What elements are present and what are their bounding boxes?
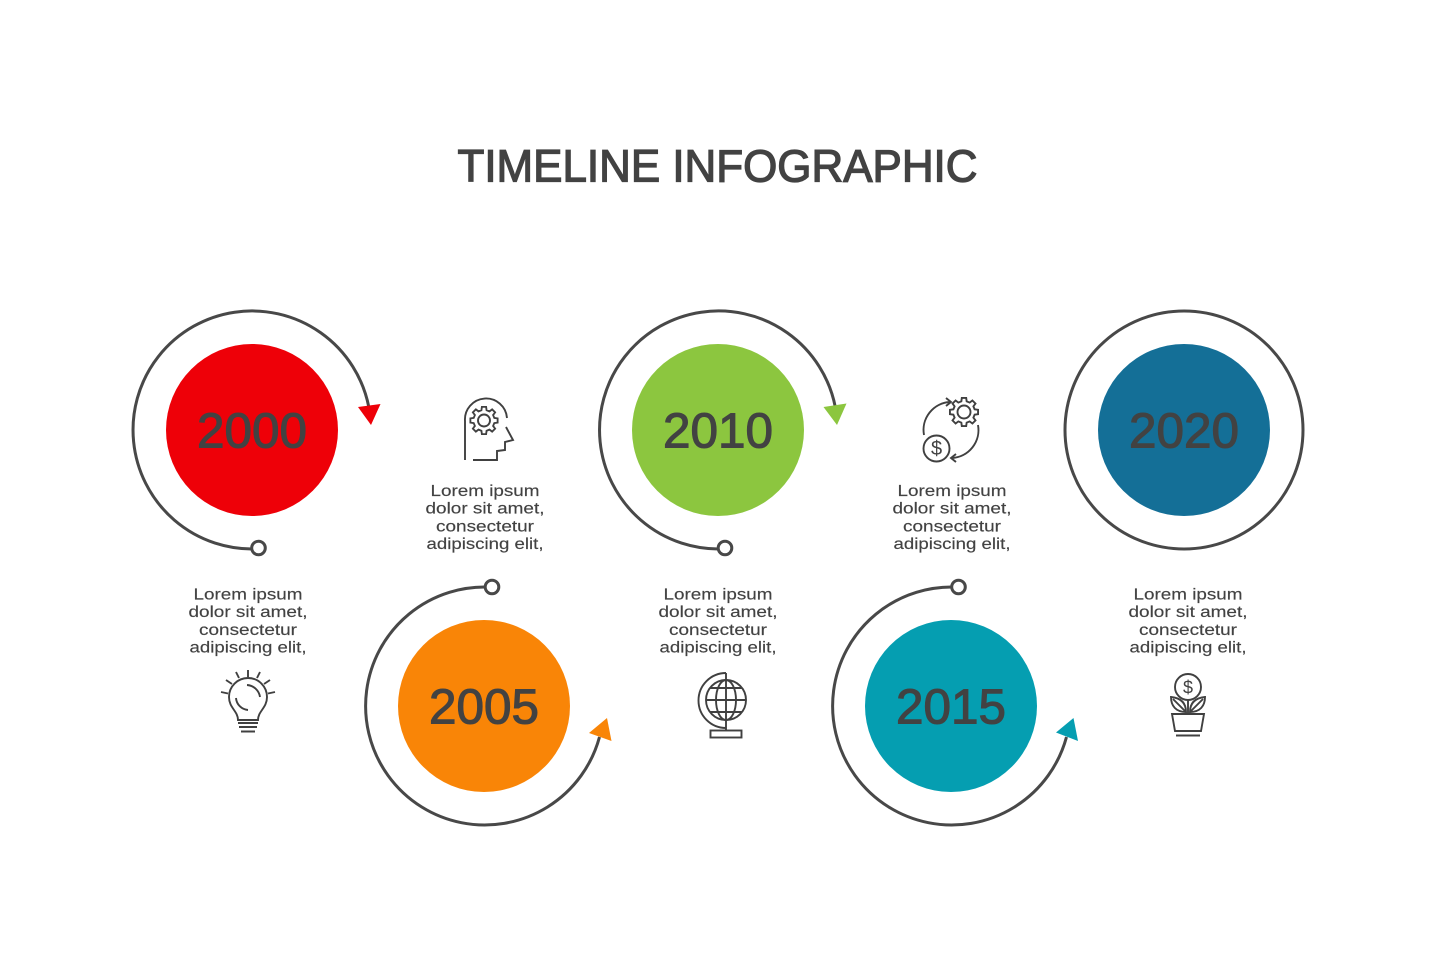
text block: 2005 xyxy=(426,483,544,553)
year badge xyxy=(398,620,570,792)
text block: 2005: Lorem ipsum xyxy=(430,483,540,500)
text block: 2010: Lorem ipsum xyxy=(664,586,772,604)
year badge xyxy=(632,344,804,516)
text block: 2015: adipiscing elit, xyxy=(894,536,1010,553)
text block: 2010: consectetur xyxy=(669,622,768,639)
text block: 2000: Lorem ipsum xyxy=(194,586,302,604)
year badge: 2010 xyxy=(663,404,773,458)
year badge: 2005 xyxy=(429,680,539,734)
full ring xyxy=(1065,311,1303,549)
text block: 2015: Lorem ipsum xyxy=(898,483,1006,500)
year badge: 2015 xyxy=(896,680,1006,734)
text block: 2005: consectetur xyxy=(436,518,535,536)
icon: gear and money cycle xyxy=(924,398,978,462)
text block: 2005: adipiscing elit, xyxy=(426,536,544,553)
text block: 2020: consectetur xyxy=(1139,622,1238,639)
ring arc with arrow xyxy=(833,580,1078,825)
ring arc with arrow xyxy=(600,311,846,555)
text block: 2000: adipiscing elit, xyxy=(190,640,306,656)
text block: 2020 xyxy=(1128,586,1248,656)
text block: 2000: consectetur xyxy=(199,622,298,639)
text block: 2000 xyxy=(188,586,308,656)
text block: 2000: dolor sit amet, xyxy=(188,604,308,621)
timeline step: 2010 xyxy=(600,311,846,555)
text block: 2020: dolor sit amet, xyxy=(1128,604,1248,621)
text block: 2015 xyxy=(892,483,1012,553)
icon: desk globe xyxy=(698,673,746,738)
text block: 2010: adipiscing elit, xyxy=(660,640,776,656)
timeline step: 2015 xyxy=(833,580,1078,825)
icon: money plant xyxy=(1171,674,1205,736)
text block: 2020: adipiscing elit, xyxy=(1130,640,1246,656)
year badge: 2020 xyxy=(1129,404,1239,458)
timeline step: 2005 xyxy=(366,580,612,825)
text block: 2010 xyxy=(658,586,778,656)
text block: 2010: dolor sit amet, xyxy=(658,604,778,621)
title: TIMELINE INFOGRAPHIC xyxy=(458,140,978,192)
year badge xyxy=(865,620,1037,792)
text block: 2020: Lorem ipsum xyxy=(1134,586,1242,604)
icon: money plant: $ xyxy=(1183,678,1193,698)
icon: head with gear xyxy=(465,398,513,460)
text block: 2005: dolor sit amet, xyxy=(426,500,544,518)
text block: 2015: consectetur xyxy=(903,518,1002,536)
icon: light bulb xyxy=(221,670,275,732)
timeline step: 2020 xyxy=(1065,311,1303,549)
icon: gear and money cycle: $ xyxy=(931,438,942,460)
timeline step: 2000 xyxy=(133,311,380,555)
year badge xyxy=(1098,344,1270,516)
ring arc with arrow xyxy=(133,311,380,555)
year badge xyxy=(166,344,338,516)
ring arc with arrow xyxy=(366,580,612,825)
text block: 2015: dolor sit amet, xyxy=(892,500,1012,518)
year badge: 2000 xyxy=(197,404,307,458)
